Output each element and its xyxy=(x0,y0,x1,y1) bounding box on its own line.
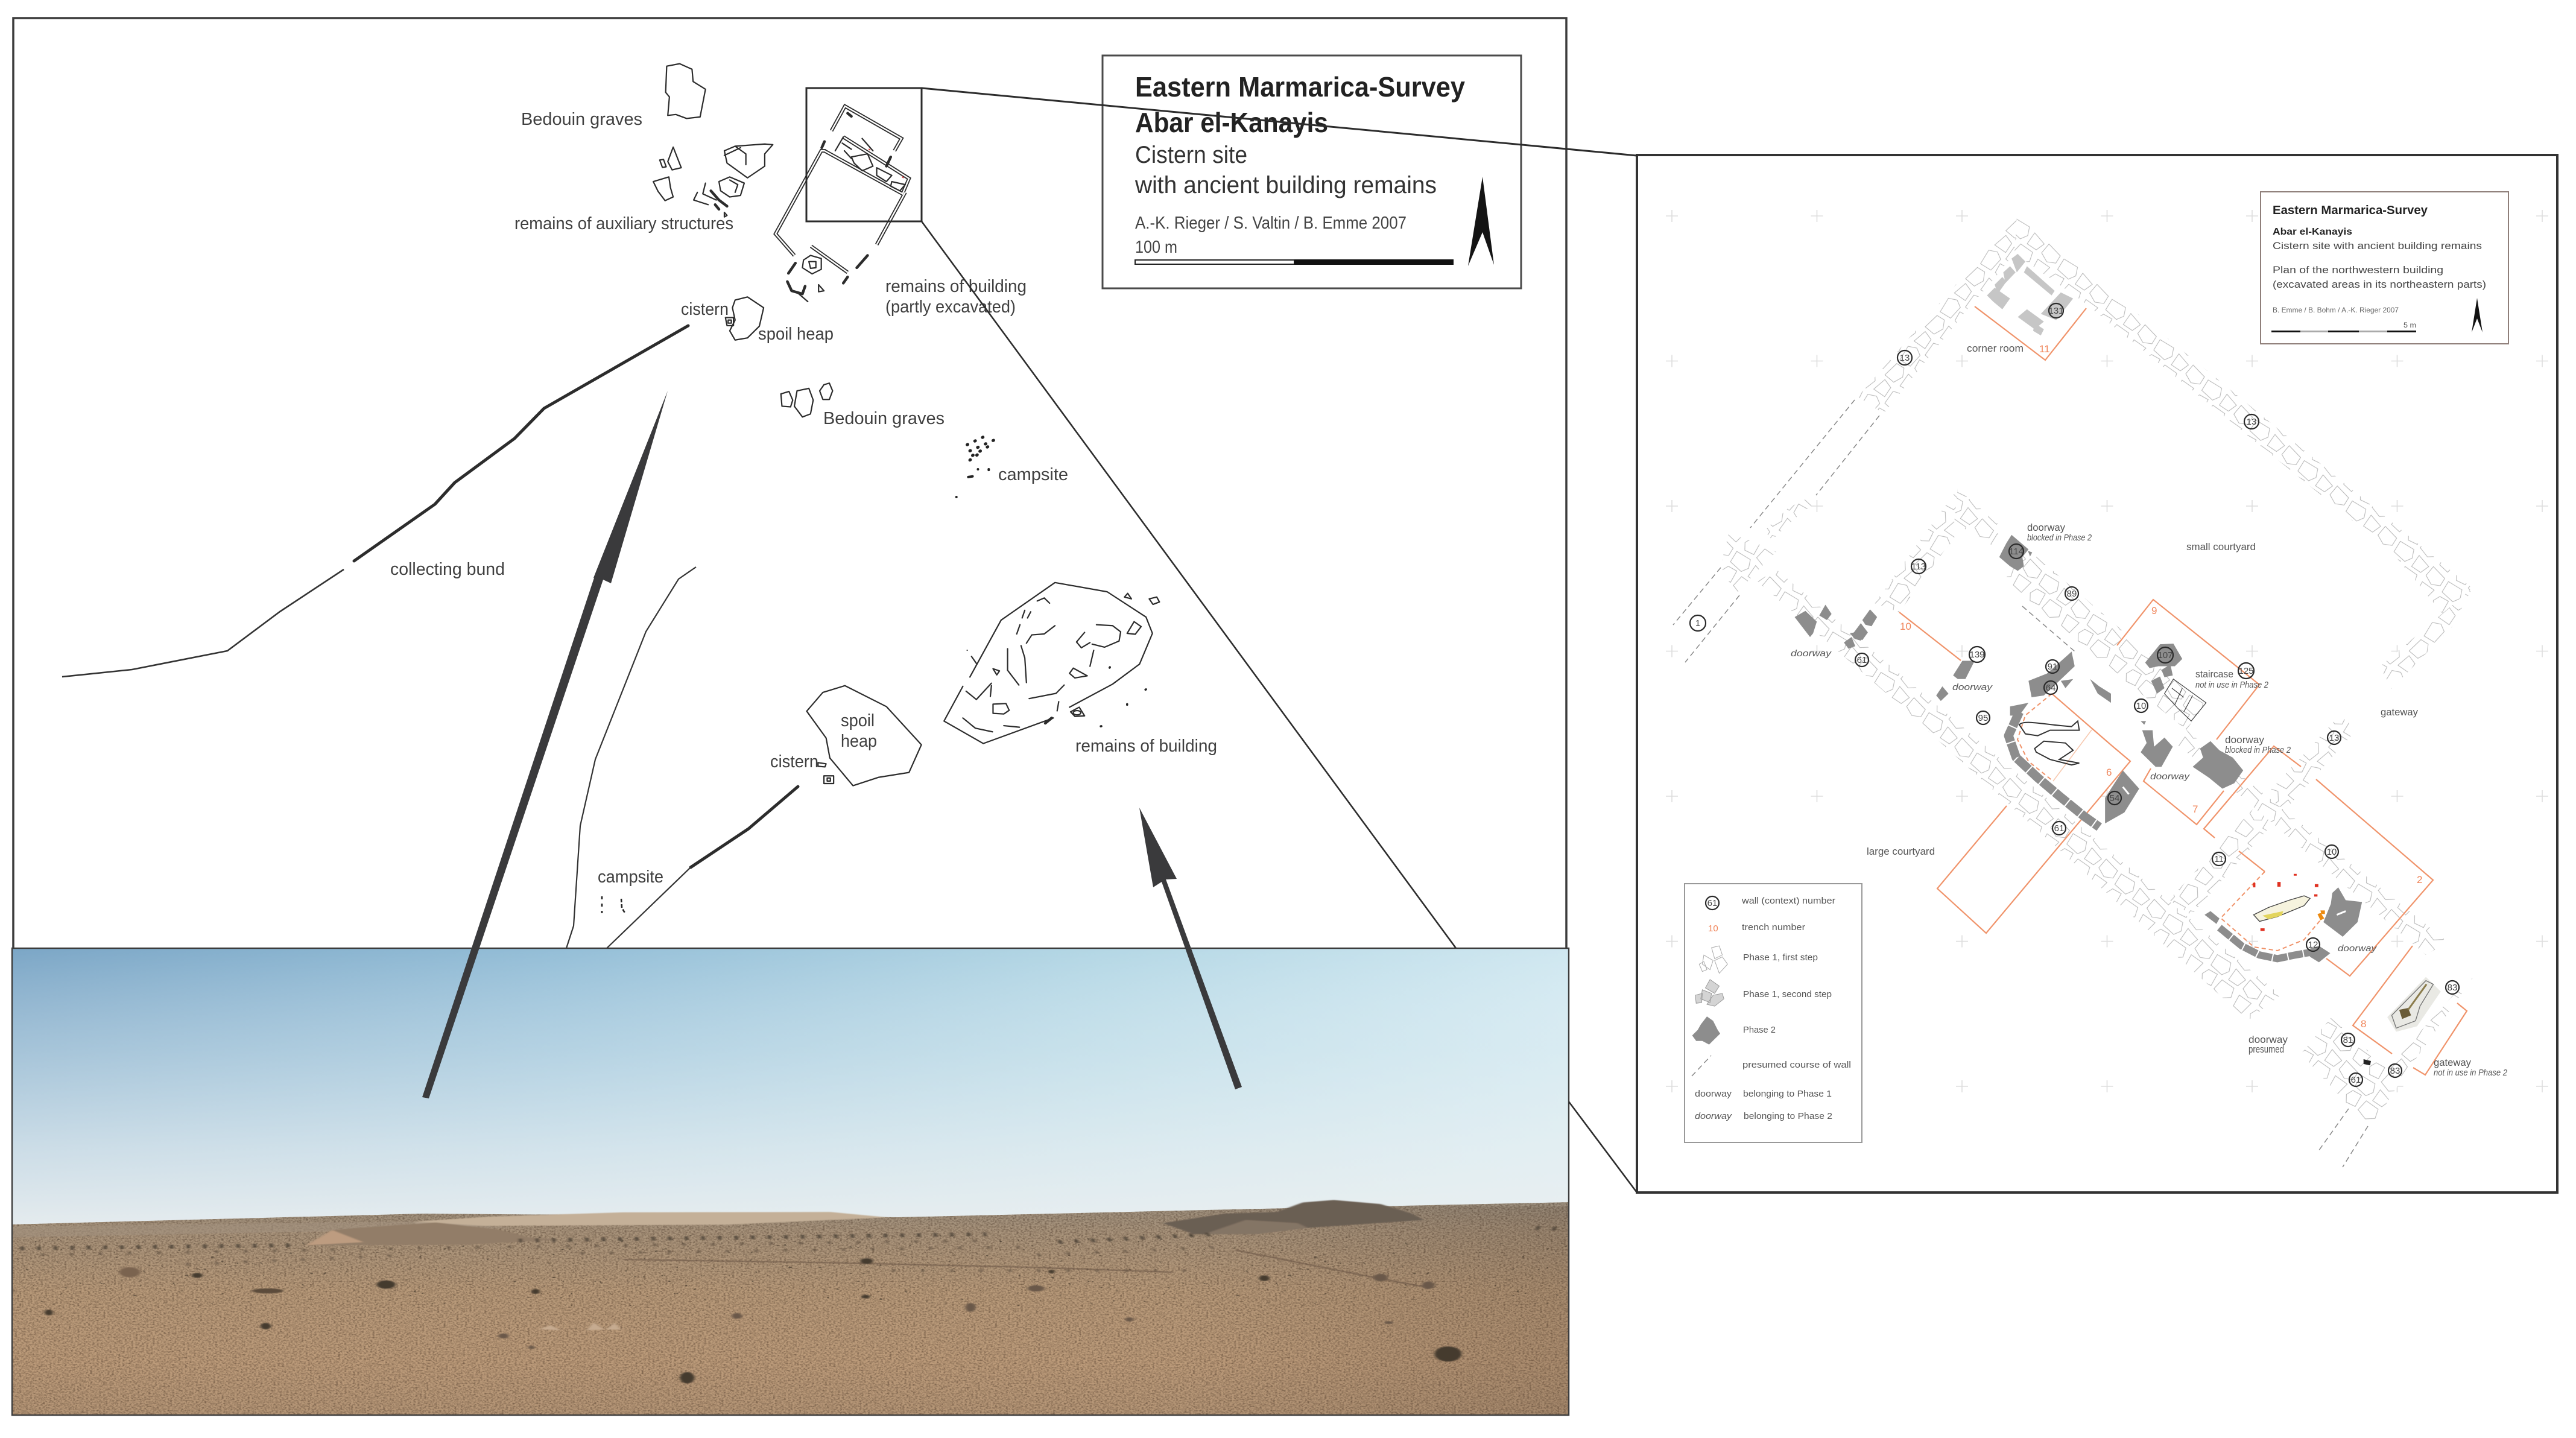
map: building complex inside inset xyxy=(811,106,909,283)
building outer wall, left xyxy=(776,151,826,255)
panel: detailed building plan xyxy=(1637,155,2557,1193)
plan: labels: blocked in Phase 2 xyxy=(2225,745,2291,755)
legend text: belonging to Phase 2: belonging to Phase 2 xyxy=(1744,1111,1832,1121)
auxiliary structures xyxy=(653,144,773,217)
plan: Phase 1 second step stones xyxy=(1987,254,2073,335)
plan: labels: doorway xyxy=(2248,1034,2288,1045)
plan: wall numbers: 131 xyxy=(2048,306,2064,316)
second collecting bund xyxy=(607,787,798,948)
legend text: phase 2: Phase 2 xyxy=(1743,1025,1776,1035)
arrow: to northern building xyxy=(422,391,668,1098)
plan: wall numbers: 89 xyxy=(2067,589,2077,599)
right ruin mound xyxy=(1163,1200,1424,1234)
spoil heap south xyxy=(807,686,922,786)
plan: trench numbers: 2 xyxy=(2417,874,2422,885)
plan: labels: gateway xyxy=(2434,1057,2471,1068)
plan: wall numbers: 91 xyxy=(2048,662,2057,672)
plan: Phase 2 stones centre east xyxy=(2105,644,2441,1065)
panel: plan title box: (excavated areas in its northeastern parts) xyxy=(2273,279,2486,290)
icon: north arrow xyxy=(2472,298,2483,332)
plan: labels: not in use in Phase 2 xyxy=(2434,1068,2508,1078)
plan: wall numbers: 61 xyxy=(1857,655,1867,665)
scale bar xyxy=(1135,259,1454,265)
plan: wall numbers: 13 xyxy=(1900,353,1910,363)
map labels: cistern xyxy=(681,300,729,319)
photo: ground xyxy=(12,1202,1569,1415)
plan: wall numbers: 13 xyxy=(2329,733,2339,743)
plan: labels: staircase xyxy=(2195,668,2233,680)
plan: wall numbers: 83 xyxy=(2390,1066,2400,1076)
plan: labels: large courtyard xyxy=(1867,846,1935,857)
site name: Abar el-Kanayis xyxy=(2273,227,2352,237)
map: northern site features xyxy=(653,64,832,417)
map labels: cistern xyxy=(770,752,818,771)
plan: wall numbers: 11 xyxy=(2214,854,2224,864)
plan: wall numbers: 10 xyxy=(2136,701,2146,711)
finds markers xyxy=(2253,874,2318,931)
pale rocks xyxy=(540,1323,621,1330)
plan: trench numbers: 8 xyxy=(2361,1018,2366,1030)
left ruin mound xyxy=(306,1223,560,1245)
zoom line: inset top to plan xyxy=(922,88,1637,156)
panel: plan title box: Plan of the northwestern building xyxy=(2273,264,2443,276)
plan: labels: doorway xyxy=(2027,522,2065,533)
plan: trench numbers: 9 xyxy=(2151,605,2157,616)
panel: plan title box xyxy=(2261,192,2508,344)
room details xyxy=(822,113,891,283)
plan: wall numbers: 1 xyxy=(1695,618,1700,629)
spoil heap north xyxy=(730,297,764,340)
legend: doorway phase 2: doorway xyxy=(1695,1111,1733,1121)
map labels: remains of building xyxy=(885,277,1027,296)
legend: doorway phase 1: doorway xyxy=(1695,1089,1732,1099)
second burial xyxy=(2387,977,2441,1032)
individual shrubs xyxy=(45,1258,1461,1384)
plan: labels xyxy=(1791,343,2508,1078)
legend text: wall number: wall (context) number xyxy=(1741,896,1835,906)
subtitle: Abar el-Kanayis xyxy=(1135,107,1328,138)
plan: trench numbers: 10 xyxy=(1900,621,1911,632)
legend: presumed wall line xyxy=(1692,1056,1711,1076)
plan: wall numbers: 83 xyxy=(2448,983,2457,993)
Bedouin graves group xyxy=(781,383,832,417)
map labels: (partly excavated) xyxy=(885,297,1016,317)
plan: presumed walls dashed xyxy=(1673,400,2368,1167)
title: Eastern Marmarica-Survey xyxy=(2273,204,2428,217)
title: Eastern Marmarica-Survey xyxy=(1135,71,1465,103)
map labels: collecting bund xyxy=(390,560,505,579)
plan: wall numbers: 107 xyxy=(2157,650,2173,660)
map labels: spoil xyxy=(841,711,875,730)
plan: labels: not in use in Phase 2 xyxy=(2195,680,2269,690)
panel: site map frame xyxy=(13,18,1566,959)
map: campsite dots north xyxy=(957,437,994,497)
rows of shrubs xyxy=(21,1228,1568,1249)
photo: shrubs speckle xyxy=(12,1234,1569,1306)
plan: labels: blocked in Phase 2 xyxy=(2027,533,2092,543)
icon: Bedouin grave outline xyxy=(666,64,706,118)
survey grid crosses xyxy=(1653,199,2551,1104)
plan: labels: doorway xyxy=(2150,771,2191,782)
distant ridge xyxy=(415,1212,887,1226)
legend text: trench number: trench number xyxy=(1742,922,1805,933)
photo: landscape features xyxy=(13,1200,1568,1384)
horizon haze xyxy=(13,1221,519,1237)
icon: cistern north xyxy=(726,318,733,326)
building outlying remains xyxy=(787,255,824,302)
wadi line centre xyxy=(566,567,696,948)
plan: labels: presumed xyxy=(2248,1044,2284,1055)
panel: map title box: with ancient building remains xyxy=(1135,172,1437,198)
plan: labels: small courtyard xyxy=(2186,541,2256,553)
plan: wall numbers: 61 xyxy=(2054,823,2064,834)
map labels: Bedouin graves xyxy=(823,409,945,428)
plan: stone walls xyxy=(1723,215,2473,1126)
map labels: heap xyxy=(841,732,877,751)
arrow: to southern building xyxy=(1139,808,1242,1089)
legend text: first step: Phase 1, first step xyxy=(1743,952,1818,963)
icon: north arrow xyxy=(1468,177,1494,266)
scale label: 100 m xyxy=(1135,238,1177,257)
plan: wall numbers: 113 xyxy=(1911,562,1926,572)
plan: Phase 2 stones centre west xyxy=(1844,630,2111,827)
staircase xyxy=(2165,679,2206,721)
legend: phase 2 icon xyxy=(1692,1016,1720,1045)
map labels: campsite xyxy=(998,465,1068,484)
panel: map title box xyxy=(1103,55,1521,288)
plan: wall numbers: 10 xyxy=(2327,847,2337,857)
legend: trench number: 10 xyxy=(1708,923,1718,934)
scale label: 5 m xyxy=(2404,321,2416,329)
plan: wall numbers xyxy=(1690,303,2459,1086)
legend: phase 1 second step icon xyxy=(1695,980,1724,1006)
credits: A.-K. Rieger / S. Valtin / B. Emme 2007 xyxy=(1135,214,1407,233)
photo: ground texture xyxy=(12,1200,1569,1415)
plan: labels: doorway xyxy=(2338,943,2378,954)
icon: cistern south xyxy=(818,762,834,784)
plan: labels: doorway xyxy=(2225,734,2264,746)
plan: labels: doorway xyxy=(1791,648,1832,659)
plan: trench numbers: 11 xyxy=(2039,343,2050,355)
plan: trench numbers xyxy=(1900,343,2422,1030)
legend text: presumed wall: presumed course of wall xyxy=(1742,1060,1851,1070)
plan: wall numbers: 13 xyxy=(2247,417,2256,427)
chart line: collecting bund xyxy=(62,326,688,677)
map labels: remains of building xyxy=(1075,736,1217,756)
plan: labels: gateway xyxy=(2381,706,2418,718)
description: Cistern site xyxy=(1135,142,1247,168)
zoom line: inset bottom to photo xyxy=(922,221,1456,948)
plan: wall numbers: 54 xyxy=(2110,793,2119,803)
plan: wall numbers: 139 xyxy=(1969,650,1985,660)
scale bar xyxy=(2271,331,2416,332)
map labels: campsite xyxy=(598,867,663,887)
building inner walls xyxy=(963,594,1159,732)
plan: wall numbers: 95 xyxy=(1978,713,1988,723)
burial outlines xyxy=(2019,721,2079,765)
inset rectangle on map xyxy=(806,88,922,221)
plan: wall numbers: 125 xyxy=(2238,666,2254,676)
remains of building outline xyxy=(944,583,1153,744)
panel: plan legend xyxy=(1685,884,1862,1142)
panel: landscape photo xyxy=(12,948,1569,1415)
photo border xyxy=(12,948,1569,1415)
description: Cistern site with ancient building remains xyxy=(2273,240,2482,252)
plan: wall numbers: 12 xyxy=(2308,940,2318,950)
map labels: spoil heap xyxy=(758,325,834,344)
map labels xyxy=(390,110,1217,887)
rooms xyxy=(835,137,905,191)
plan: trench outlines xyxy=(1899,306,2467,1075)
legend: wall number xyxy=(1706,896,1719,910)
plan: wall numbers: 64 xyxy=(2046,683,2055,693)
plan: trench numbers: 7 xyxy=(2192,803,2198,815)
zoom line: photo to plan xyxy=(1568,1101,1637,1193)
plan: Phase 2 stones north xyxy=(1795,535,2032,640)
map labels: Bedouin graves xyxy=(521,110,642,129)
burial pit with finds xyxy=(2253,896,2310,922)
legend text: belonging to Phase 1: belonging to Phase 1 xyxy=(1743,1089,1832,1099)
map: southern site features xyxy=(807,583,1159,786)
legend: phase 1 first step icon xyxy=(1699,946,1727,974)
photo: sky xyxy=(12,948,1569,1232)
credits: B. Emme / B. Bohm / A.-K. Rieger 2007 xyxy=(2273,306,2399,314)
plan: wall numbers: 61 xyxy=(2351,1075,2361,1085)
plan: labels: corner room xyxy=(1967,343,2024,354)
plan: wall numbers: 81 xyxy=(2343,1035,2353,1045)
photo: ground shading right xyxy=(1358,1206,1568,1414)
outer walls xyxy=(811,106,909,273)
campsite dots south xyxy=(602,896,625,914)
plan: trench numbers: 6 xyxy=(2106,767,2112,778)
legend: wall number: 61 xyxy=(1707,898,1717,908)
plan: labels: doorway xyxy=(1952,682,1993,692)
map labels: remains of auxiliary structures xyxy=(514,214,733,233)
legend text: second step: Phase 1, second step xyxy=(1743,989,1832,999)
plan: wall numbers: 114 xyxy=(2009,546,2024,557)
